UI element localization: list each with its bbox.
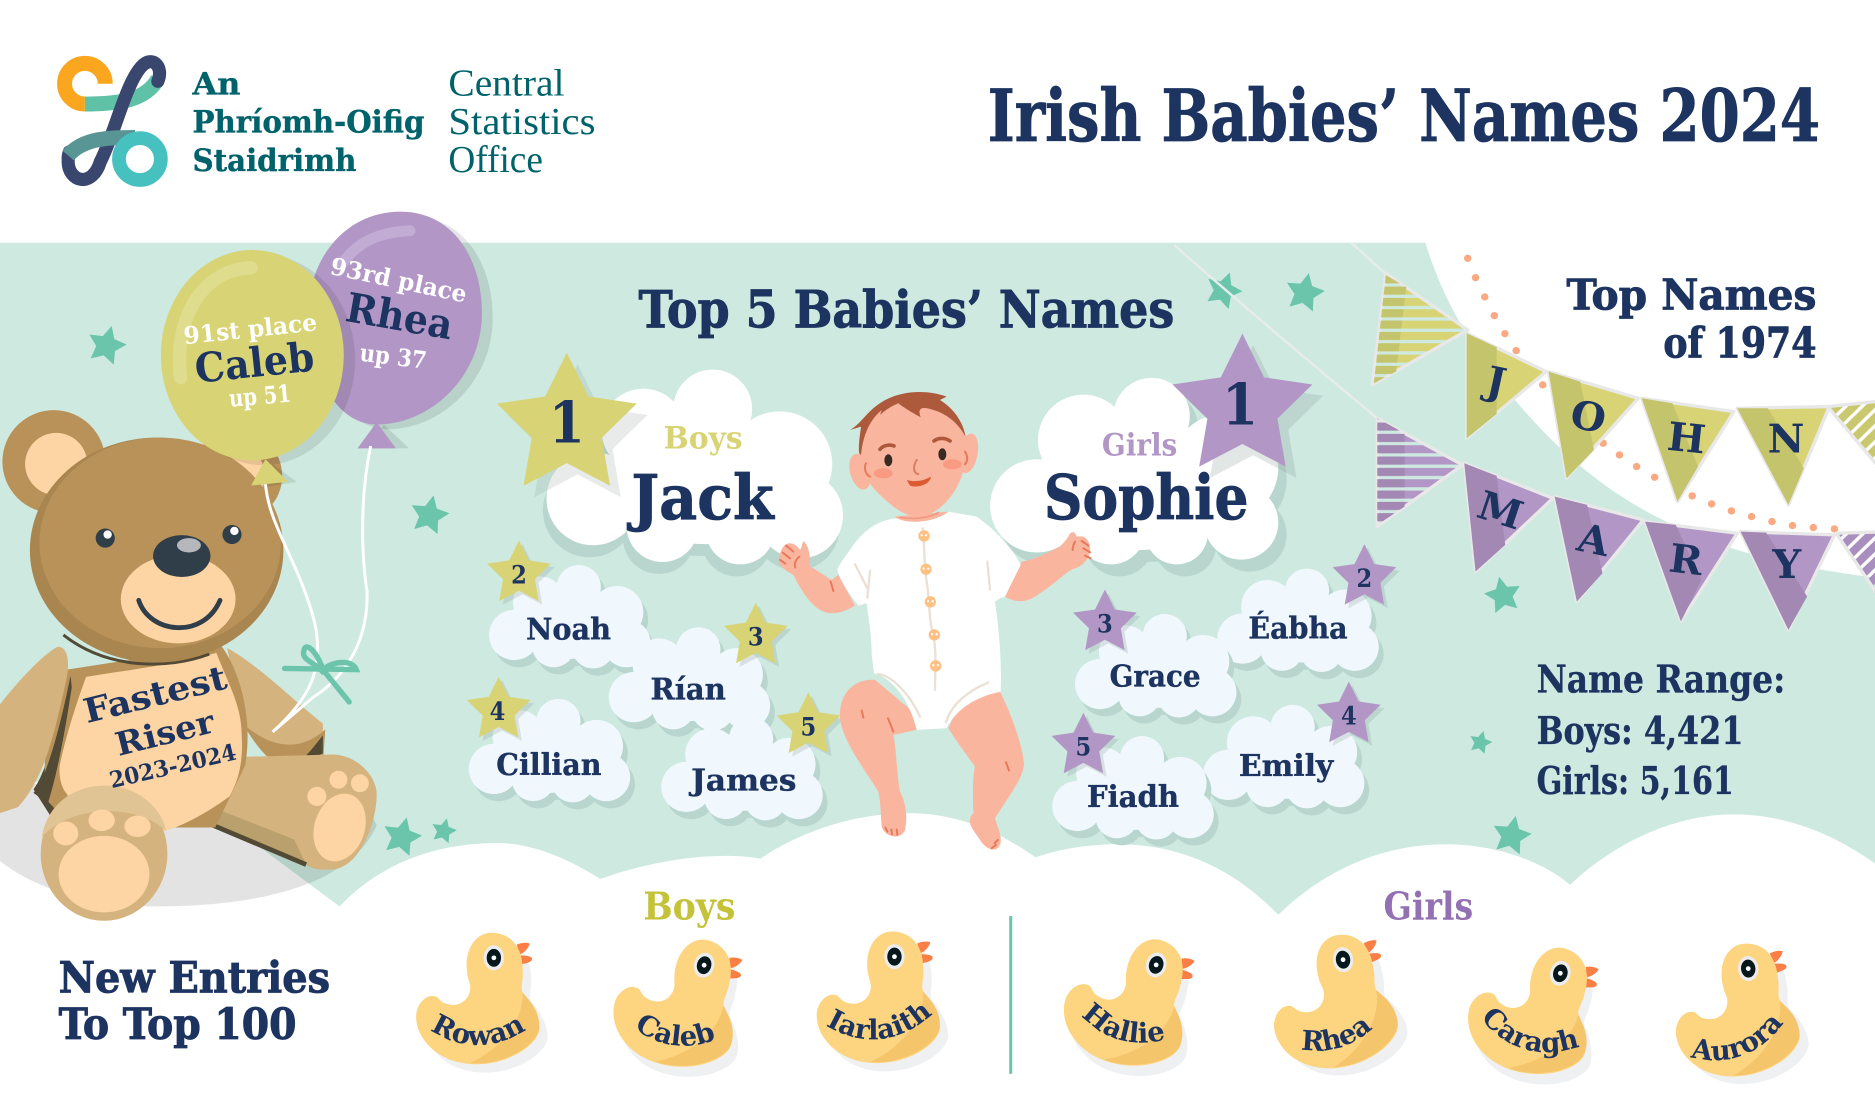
bunting: JOHN: O	[1566, 392, 1610, 443]
boy 4: Cillian: 4	[490, 696, 505, 726]
heading: top names of 1974	[1566, 271, 1816, 368]
big cloud: boys	[543, 370, 843, 576]
girls number one: Girls	[1102, 428, 1177, 464]
duck: Caragh: Caragh	[1484, 1009, 1580, 1058]
teddy bear	[0, 410, 377, 921]
girl 2: Éabha: 2	[1357, 563, 1372, 593]
boy 5: James: 5	[800, 711, 816, 741]
girl 3: Grace	[1073, 590, 1241, 725]
balloon: Caleb: 91st place	[182, 308, 318, 350]
boys number one	[497, 353, 775, 534]
bunting: MARY	[1377, 418, 1875, 630]
logo text: Irish name: Staidrimh	[193, 143, 356, 179]
boys number one: Jack	[626, 461, 775, 534]
bunting: MARY: R	[1667, 536, 1706, 585]
logo text: Irish name: Phríomh-Oifig	[193, 105, 425, 141]
balloon: Rhea: Rhea	[342, 283, 457, 349]
decorative teal stars	[83, 266, 1535, 858]
heading: top names of 1974: Top Names	[1566, 271, 1816, 320]
name range	[1537, 657, 1785, 804]
boy 5: James: James	[689, 763, 796, 798]
baby illustration	[779, 392, 1091, 850]
balloon: Rhea: 93rd place	[328, 252, 469, 308]
boy 2: Noah: 2	[511, 560, 527, 590]
balloon: Caleb: up 51	[228, 380, 292, 413]
big cloud: girls	[990, 378, 1287, 576]
duck: Rhea: Rhea	[1302, 1020, 1373, 1052]
logo mark	[65, 62, 161, 180]
duck: Aurora: Aurora	[1690, 1018, 1784, 1061]
white strip in bunting corner: orange dotted arc	[1464, 255, 1838, 533]
duck: Hallie: Hallie	[1082, 1001, 1164, 1043]
boy 4: Cillian: Cillian	[496, 748, 601, 783]
bunting: JOHN: N	[1768, 417, 1804, 462]
duck: Rowan: Rowan	[430, 1013, 526, 1046]
bunting: MARY: Y	[1771, 543, 1802, 588]
girl 5: Fiadh	[1052, 713, 1219, 847]
heading: top names of 1974: of 1974	[1663, 319, 1816, 368]
boy 3: Rían	[609, 603, 791, 738]
bunting strings	[1174, 243, 1387, 419]
boys number one: 1	[549, 388, 585, 456]
name range: Boys: 4,421	[1537, 709, 1743, 754]
heading: top 5: Top 5 Babies’ Names	[639, 281, 1174, 341]
bunting: MARY: A	[1572, 515, 1614, 566]
boy 2: Noah: Noah	[526, 613, 611, 648]
name range: Name Range:	[1537, 657, 1785, 702]
boys label: Boys	[643, 885, 735, 930]
girls number one: 1	[1222, 371, 1258, 439]
duck: Iarlaith	[816, 932, 948, 1072]
divider	[1009, 916, 1012, 1074]
logo text: English name: Office	[448, 139, 543, 181]
boy 3: Rían: 3	[748, 622, 764, 652]
new entries heading: To Top 100	[59, 1000, 297, 1050]
girl 2: Éabha: Éabha	[1248, 611, 1348, 647]
balloon: Caleb	[161, 250, 355, 488]
balloon: Rhea: up 37	[358, 339, 428, 375]
girl 4: Emily: Emily	[1239, 749, 1335, 784]
duck: Caleb	[613, 940, 742, 1077]
teddy bear: Fastest	[80, 658, 231, 731]
girl 3: Grace: 3	[1097, 609, 1113, 639]
new entries heading: New Entries	[59, 954, 330, 1004]
new entries heading	[59, 954, 330, 1050]
boy 3: Rían: Rían	[651, 673, 726, 708]
balloon: Caleb: Caleb	[192, 333, 316, 393]
girl 2: Éabha	[1217, 544, 1400, 679]
girls number one: Sophie	[1044, 461, 1248, 534]
boy 4: Cillian	[467, 677, 635, 810]
girl 4: Emily: 4	[1341, 701, 1357, 731]
teddy bear: 2023-2024	[107, 740, 239, 794]
bunting: JOHN	[1372, 273, 1875, 505]
logo text: English name: Central	[448, 63, 564, 105]
bear ground shadow	[0, 783, 377, 906]
logo text: Irish name	[191, 66, 425, 179]
boys number one: Boys	[664, 420, 743, 456]
duck: Hallie	[1064, 939, 1194, 1076]
bunting: MARY: M	[1472, 483, 1528, 539]
girl 4: Emily	[1203, 682, 1384, 816]
girl 5: Fiadh: Fiadh	[1087, 780, 1179, 815]
bunting: JOHN: H	[1665, 414, 1708, 463]
girl 3: Grace: Grace	[1110, 659, 1201, 694]
girls number one	[1044, 334, 1323, 534]
duck: Aurora	[1676, 944, 1808, 1084]
duck: Rowan	[416, 932, 548, 1072]
girl 5: Fiadh: 5	[1076, 732, 1091, 762]
ribbon bow	[285, 647, 356, 702]
balloon: Rhea	[309, 212, 493, 448]
mint background with cloud scallops	[0, 243, 1875, 915]
boy 2: Noah	[487, 541, 655, 676]
girls label: Girls	[1384, 885, 1473, 930]
duck: Iarlaith: Iarlaith	[826, 1005, 932, 1040]
boy 5: James	[661, 692, 844, 827]
duck: Caleb: Caleb	[638, 1015, 714, 1046]
duck: Rhea	[1274, 934, 1408, 1076]
teddy bear: Riser	[111, 702, 219, 764]
bunting: JOHN: J	[1479, 358, 1510, 407]
name range: Girls: 5,161	[1537, 759, 1734, 804]
duck: Caragh	[1468, 948, 1599, 1084]
logo text: English name	[448, 63, 596, 181]
balloon strings	[265, 446, 371, 732]
logo text: English name: Statistics	[448, 101, 596, 143]
logo text: Irish name: An	[191, 66, 240, 102]
